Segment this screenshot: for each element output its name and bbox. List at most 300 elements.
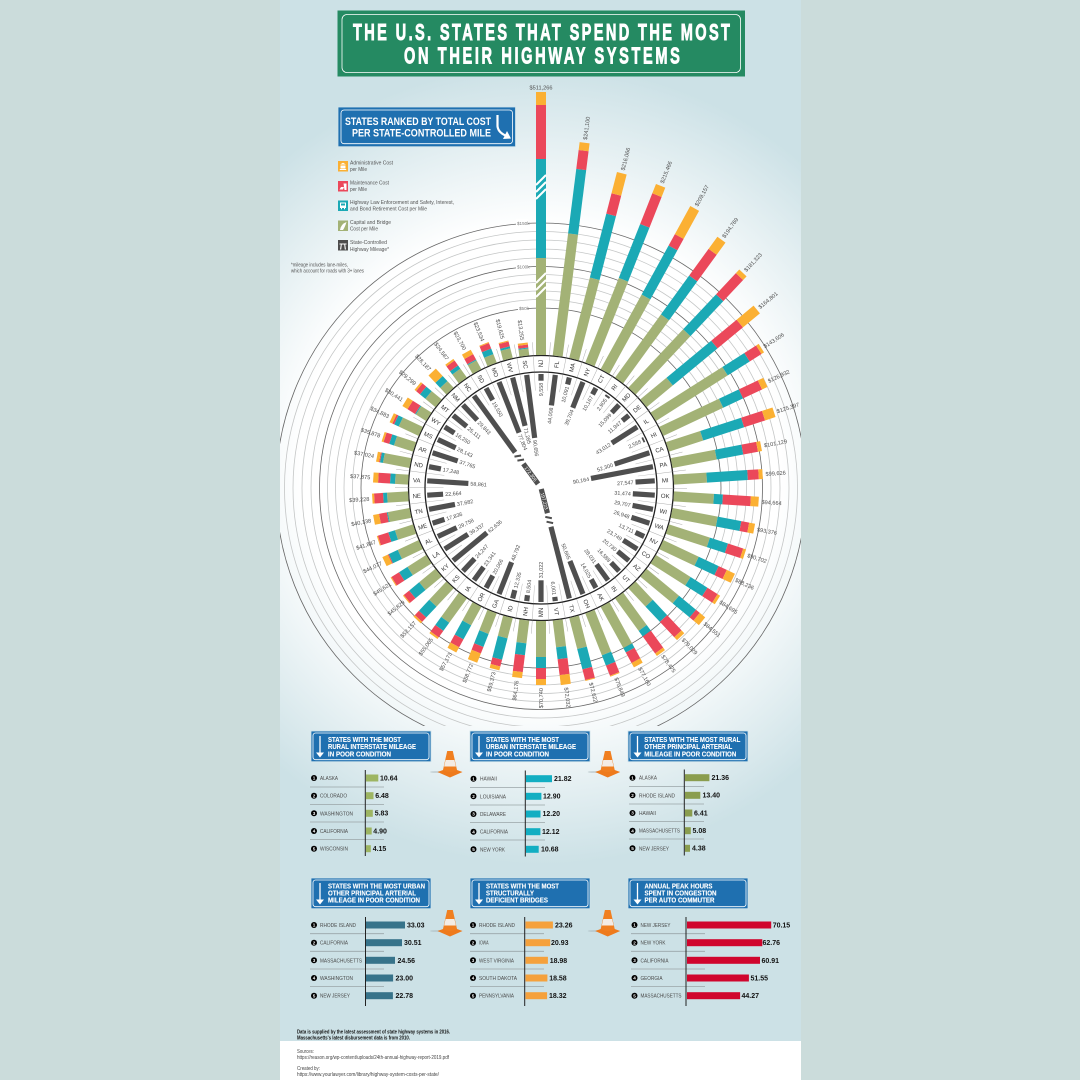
title (338, 10, 745, 76)
spoke: AK (579, 562, 651, 687)
panel: rural interstate mileage (310, 731, 431, 856)
rows (632, 922, 790, 1000)
rows: 2 (633, 940, 636, 945)
spoke: HI: $126,932 (767, 369, 791, 385)
rows: CALIFORNIA (320, 941, 348, 947)
rows: 3 (472, 812, 475, 817)
spoke: WI: WI (659, 509, 668, 516)
rows: WASHINGTON (320, 811, 353, 817)
legend item: state-controlled mileage: State-Controlled (350, 240, 387, 246)
rows (630, 775, 729, 853)
title: ON THEIR HIGHWAY SYSTEMS (404, 43, 680, 70)
spoke: HI (628, 369, 791, 451)
rows (470, 922, 573, 1000)
legend item: administrative cost: Administrative Cost (350, 160, 393, 166)
spoke: KS: KS (452, 575, 462, 585)
spoke: NY: NY (584, 368, 592, 378)
legend item: maintenance cost: Maintenance Cost (350, 180, 389, 186)
spoke: NH: NH (523, 607, 530, 616)
spoke: NM (413, 354, 491, 436)
spoke: ME: 17,836 (446, 512, 463, 523)
spoke: AR: $35,878 (360, 428, 381, 440)
rows: 2 (472, 794, 475, 799)
rows: 3 (313, 811, 316, 816)
spoke: MA: MA (569, 363, 577, 373)
scale labels: $150k (517, 221, 530, 226)
data note: Data is supplied by the latest assessment of state highway systems in 2016. (297, 1030, 451, 1036)
heading sign: states ranked: STATES RANKED BY TOTAL COST (345, 116, 491, 128)
spoke: TN: TN (414, 509, 423, 516)
rows: HAWAII (480, 777, 497, 783)
title: THE U.S. STATES THAT SPEND THE MOST (353, 20, 730, 46)
spoke: ND: 17,248 (442, 467, 459, 476)
spoke: WI: $93,376 (756, 527, 777, 537)
bars (526, 775, 552, 853)
spoke: NM: 29,843 (476, 420, 491, 436)
spoke: KS (400, 544, 490, 640)
rows: NEW JERSEY (320, 994, 350, 1000)
spoke: OH (559, 543, 625, 698)
rows: CALIFORNIA (640, 958, 669, 964)
rows: 1 (313, 776, 316, 781)
rows: 24.56 (398, 958, 415, 965)
spoke: VA: 58,861 (470, 482, 487, 489)
legend item: administrative cost: per Mile (350, 167, 367, 173)
spoke: KS: 24,247 (475, 544, 490, 560)
rows: 18.98 (550, 958, 567, 965)
rows: GEORGIA (640, 976, 663, 982)
rows: 4.38 (692, 846, 706, 853)
spoke: ND: $37,024 (353, 450, 374, 460)
spoke: NV: 13,711 (617, 523, 635, 535)
spoke: WY: 16,250 (454, 432, 471, 446)
sign: urban interstate: IN POOR CONDITION (486, 751, 549, 758)
rows: 4 (472, 829, 475, 834)
rows: 5 (631, 846, 634, 851)
spoke: NE: 22,664 (445, 491, 462, 498)
rows: SOUTH DAKOTA (479, 976, 517, 982)
spoke: GA: GA (492, 599, 501, 609)
spoke: AK: $77,160 (636, 667, 651, 687)
spoke: VT: VT (552, 607, 559, 616)
spoke: AK: AK (595, 593, 604, 603)
spoke: ID: 12,335 (513, 572, 523, 589)
spoke: MT: MT (439, 404, 450, 415)
legend item: administrative cost (338, 160, 393, 173)
spoke: IL: 43,012 (595, 442, 612, 456)
spoke: WV: WV (505, 362, 513, 373)
spoke: LA: 39,337 (469, 523, 486, 537)
spoke: IN: IN (609, 585, 617, 594)
rows: COLORADO (320, 794, 348, 800)
spoke: WA (613, 510, 767, 565)
spoke: HI: 2,558 (628, 439, 642, 450)
rows: 20.93 (551, 940, 569, 947)
state ring (408, 356, 674, 620)
spoke: SC: 90,656 (531, 440, 539, 457)
rows: 3 (313, 958, 316, 963)
rows: MASSACHUSETTS (639, 829, 680, 835)
sign: bridges: DEFICIENT BRIDGES (486, 898, 548, 905)
legend item: state-controlled mileage: Highway Mileage* (350, 247, 390, 253)
rows: 5 (472, 847, 475, 852)
panel: structurally deficient bridges (470, 878, 590, 1006)
spoke: MI: $99,626 (765, 471, 786, 478)
spoke: CA: CA (655, 447, 665, 455)
rows: 18.58 (549, 976, 567, 982)
spoke: NY: 39,704 (564, 409, 576, 427)
rows: HAWAII (639, 811, 656, 817)
spoke: WA: 26,948 (613, 510, 630, 521)
sources: https://reason.org/wp-content/uploads/24th-annual-highway-report-2019.pdf (297, 1055, 450, 1061)
spoke: SD: SD (475, 374, 485, 385)
spoke: ID (487, 572, 523, 693)
spoke: DE (607, 291, 780, 435)
bars (685, 774, 709, 852)
icon: traffic cone 2 (588, 751, 620, 778)
spoke: MN: $70,740 (539, 688, 545, 708)
rows: RHODE ISLAND (320, 923, 356, 929)
spoke: FL: FL (554, 360, 561, 368)
spoke: MS: MS (422, 431, 433, 441)
spoke: NV (617, 523, 755, 592)
legend item: maintenance cost: per Mile (350, 187, 367, 193)
sign: bridges (470, 878, 590, 909)
spoke: RI (596, 217, 740, 412)
spoke: IN (582, 548, 676, 674)
spoke: IN: 28,031 (582, 548, 597, 565)
icon: traffic cone 1 (430, 751, 462, 778)
spoke: MO: MO (489, 367, 499, 379)
rows: NEW YORK (640, 941, 666, 947)
sign: rural interstate: IN POOR CONDITION (328, 751, 391, 758)
rows: 2 (631, 793, 634, 798)
rows: 18.32 (549, 993, 567, 1000)
spoke: AK: 14,025 (579, 562, 592, 579)
spoke: AZ (601, 538, 721, 639)
sign: rural interstate (311, 731, 431, 762)
spoke: CT (582, 184, 711, 413)
scale labels (516, 219, 530, 312)
spoke: UT: 16,588 (596, 548, 611, 564)
data note: Massachusetts's latest disbursement data is from 2010. (297, 1036, 411, 1042)
spoke: KY: 62,636 (487, 519, 504, 535)
sign: bridges: STATES WITH THE MOST (486, 884, 560, 891)
legend item: law enforcement cost: and Bond Retirement Cost per Mile (350, 207, 427, 213)
spoke: NC: $24,587 (432, 342, 449, 362)
spoke: HI: HI (650, 432, 658, 440)
spoke: SD: $23,700 (452, 331, 467, 351)
rows: WEST VIRGINIA (479, 958, 514, 964)
rows: LOUISIANA (480, 794, 506, 800)
rows: 44.27 (742, 993, 759, 1000)
spoke: TN: $40,138 (351, 518, 372, 528)
spoke: KY (387, 519, 504, 618)
spoke: MA (561, 147, 632, 403)
rows: 2 (472, 940, 475, 945)
spoke: MN (539, 562, 545, 708)
rows: 33.03 (407, 922, 425, 930)
spoke: MO: 77,804 (516, 434, 528, 451)
spoke: KY: KY (441, 563, 451, 573)
spoke: KS: $53,157 (400, 621, 418, 640)
rows: 4.15 (373, 846, 386, 853)
spoke: TX: TX (567, 604, 575, 613)
spoke: OK: 31,474 (614, 491, 631, 498)
spoke: FL: $241,100 (583, 116, 592, 140)
spoke: MD: $181,323 (744, 252, 764, 274)
spoke: MS (369, 406, 473, 460)
spoke: IL (595, 332, 786, 457)
spoke: MT: 25,111 (466, 426, 482, 441)
spoke: WI: 29,707 (614, 500, 631, 509)
rows: CALIFORNIA (480, 830, 508, 836)
rows: WISCONSIN (320, 847, 348, 853)
spoke: CT: $209,157 (694, 184, 711, 208)
spoke: UT: $79,029 (680, 638, 698, 656)
spoke: NM: $28,187 (413, 354, 432, 373)
spoke: TX (537, 488, 599, 703)
data note (297, 1030, 451, 1042)
spoke: NH (512, 580, 534, 701)
footnote: mileage: *mileage includes lane-miles, (291, 262, 348, 268)
spoke: WY: WY (430, 417, 441, 427)
legend item: maintenance cost (338, 180, 389, 193)
spoke: NM: NM (450, 393, 460, 404)
spoke: TN (351, 499, 474, 528)
spoke: IL: IL (643, 418, 651, 426)
sign: urban interstate: STATES WITH THE MOST (486, 737, 560, 744)
spoke: LA (373, 523, 486, 598)
scale labels: $50k (519, 306, 530, 311)
spoke: SC: SC (521, 360, 528, 370)
spoke: IL: $143,606 (763, 332, 786, 350)
spoke: MA: $216,066 (621, 147, 632, 171)
spoke: LA: $45,621 (373, 582, 393, 598)
sign: urban interstate: URBAN INTERSTATE MILEAGE (486, 744, 576, 751)
sign: rural interstate: RURAL INTERSTATE MILEAGE (328, 744, 416, 751)
spoke: VA (350, 474, 487, 489)
spoke: NE: NE (412, 494, 421, 500)
spoke: AR: 37,765 (458, 460, 476, 470)
rows: MASSACHUSETTS (320, 958, 362, 964)
spoke: NH: 8,504 (526, 580, 533, 594)
sign: bridges: STRUCTURALLY (486, 891, 534, 898)
rows: ALASKA (320, 776, 338, 782)
spoke: AZ: $84,551 (702, 622, 721, 639)
spoke: IA (418, 551, 498, 657)
spoke: WA: $90,702 (746, 553, 767, 565)
sources (297, 1049, 450, 1078)
spoke: NJ: NJ (539, 360, 545, 367)
rows: 4 (633, 976, 636, 981)
spoke: WV (494, 319, 532, 445)
rows (311, 922, 425, 1000)
legend item: capital and bridge cost: Cost per Mile (350, 227, 378, 233)
spoke: OH: $75,849 (612, 677, 625, 698)
panel: congestion hours (628, 878, 790, 1006)
rows: 13.40 (702, 793, 720, 800)
spoke: WA: WA (654, 523, 664, 532)
rows: 21.36 (712, 775, 729, 782)
spoke: WV: 71,285 (522, 427, 532, 445)
spoke: ND (353, 450, 459, 476)
rows: NEW JERSEY (639, 846, 669, 852)
spoke: OH: 50,665 (559, 543, 571, 561)
spoke: SC: $13,255 (516, 320, 524, 341)
rows: 5.08 (692, 828, 706, 835)
sign: congestion: PER AUTO COMMUTER (644, 898, 714, 905)
rows: 4.90 (373, 828, 387, 835)
spoke: RI: 2,905 (596, 398, 609, 412)
scale labels: $100k (517, 264, 530, 270)
sign: rural arterial: MILEAGE IN POOR CONDITION (644, 751, 736, 758)
rows: WASHINGTON (320, 976, 353, 982)
spoke: NY: $215,466 (660, 161, 674, 185)
spoke: ND: ND (414, 462, 424, 470)
rows: RHODE ISLAND (479, 923, 515, 929)
footnote: mileage (290, 262, 364, 274)
spoke: OR (439, 558, 505, 673)
spoke: DE: $164,801 (758, 291, 780, 311)
spoke: OK: OK (661, 494, 670, 500)
spoke: GA (462, 544, 522, 684)
rows: CALIFORNIA (320, 829, 348, 835)
spoke: SD (451, 331, 503, 418)
spoke: ID: $59,373 (487, 672, 498, 693)
spoke: MD: MD (622, 392, 633, 404)
rows: 5 (313, 993, 316, 998)
spoke: MI (617, 471, 786, 487)
bars (366, 774, 378, 852)
spoke: MD (598, 252, 764, 429)
spoke: IA: 23,341 (483, 551, 498, 568)
spoke: MT: $29,299 (397, 370, 417, 387)
spoke: AR (360, 428, 476, 471)
rows: 1 (631, 775, 634, 780)
spoke: CO: CO (640, 551, 651, 561)
sign: congestion (628, 878, 748, 909)
rows: 60.91 (762, 958, 779, 965)
rows: 1 (313, 923, 316, 928)
legend item: law enforcement cost (338, 200, 454, 213)
rows: 10.64 (380, 775, 398, 782)
spoke: OH: OH (581, 599, 590, 609)
spoke: FL (547, 116, 592, 424)
spoke: CT: CT (597, 374, 607, 384)
spoke: PA: 90,164 (572, 477, 590, 486)
spoke: GA: 48,792 (511, 544, 522, 562)
spoke: AL: 29,758 (458, 518, 475, 530)
spoke: CA: $125,397 (776, 402, 800, 415)
spoke: CO: $84,695 (718, 600, 738, 616)
spoke: ID: ID (508, 605, 515, 613)
rows: ALASKA (639, 776, 657, 782)
spoke: AL (363, 518, 475, 575)
spoke: PA (572, 439, 788, 486)
spoke: PA: $101,129 (764, 439, 788, 449)
spoke: VT: 6,001 (549, 581, 556, 595)
spoke: SD: 19,550 (490, 401, 503, 418)
spoke: NY (564, 161, 674, 427)
rows: 30.51 (404, 940, 422, 947)
rows: 5 (313, 846, 316, 851)
spoke: NH: $64,176 (512, 680, 521, 701)
spoke: NJ (530, 86, 552, 396)
spoke: WY: $30,441 (383, 388, 404, 404)
spoke: CO (605, 529, 738, 616)
rows: 6.48 (375, 793, 389, 800)
spoke: PA: PA (659, 462, 668, 470)
legend item: capital and bridge cost (338, 220, 391, 233)
spoke: ME: $41,847 (356, 540, 377, 552)
spoke: RI: RI (611, 384, 620, 392)
spoke: MS: $34,883 (369, 406, 390, 420)
spoke: CA: 52,300 (596, 463, 614, 474)
sign: urban arterial (311, 878, 431, 909)
sign: congestion: SPENT IN CONGESTION (644, 891, 716, 898)
spoke: WY (383, 388, 471, 446)
rows: DELAWARE (480, 812, 506, 818)
rows: 4 (313, 976, 316, 981)
spoke: RI: $194,769 (722, 217, 740, 240)
legend item: capital and bridge cost: Capital and Bridge (350, 220, 391, 226)
icon: traffic cone 3 (430, 910, 462, 936)
rows: 23.26 (555, 922, 573, 930)
legend item: law enforcement cost: Highway Law Enforcement and Safety, Interest, (350, 200, 454, 206)
spoke: TX: 197,223 (539, 492, 549, 511)
legend (338, 160, 454, 253)
rows: RHODE ISLAND (639, 793, 675, 799)
rows: 23.00 (396, 976, 413, 982)
spoke: SC (516, 320, 539, 457)
bars (366, 922, 405, 999)
spoke: ME (356, 512, 463, 552)
panel: urban other principal arterial (310, 878, 431, 1006)
heading sign: states ranked (338, 107, 516, 147)
spoke: AZ: AZ (631, 564, 641, 573)
rows: 5.83 (375, 811, 388, 818)
icon: traffic cone 4 (588, 910, 620, 936)
spoke: NJ: 9,558 (539, 383, 545, 396)
rows: 5 (633, 993, 636, 998)
spoke: ME: ME (418, 523, 428, 532)
rows: MASSACHUSETTS (640, 994, 682, 1000)
sign: urban arterial: OTHER PRINCIPAL ARTERIAL (328, 891, 417, 898)
spoke: UT: UT (620, 575, 631, 585)
rows: 70.15 (773, 922, 790, 930)
spoke: VA: VA (413, 478, 421, 485)
spoke: NE: $39,228 (349, 497, 370, 504)
rows: 1 (472, 923, 475, 928)
spoke: AL: AL (424, 538, 434, 546)
sources: Created by: (297, 1066, 320, 1072)
spoke: GA: $58,772 (462, 663, 475, 684)
rows: 3 (633, 958, 636, 963)
spoke: MI: 27,547 (617, 480, 634, 487)
spoke: VA: $37,875 (350, 474, 370, 481)
bars (526, 922, 553, 999)
legend item: state-controlled mileage (338, 240, 390, 253)
sign: urban arterial: STATES WITH THE MOST URBAN (328, 884, 425, 891)
spoke: VT: $72,032 (562, 687, 571, 708)
sign: rural interstate: STATES WITH THE MOST (328, 737, 402, 744)
spoke: NC: NC (462, 383, 472, 394)
spoke: MO: $23,534 (472, 322, 485, 343)
rows: 51.55 (750, 976, 768, 982)
spoke: NV: NV (648, 538, 658, 547)
sign: urban arterial: MILEAGE IN POOR CONDITION (328, 898, 420, 905)
